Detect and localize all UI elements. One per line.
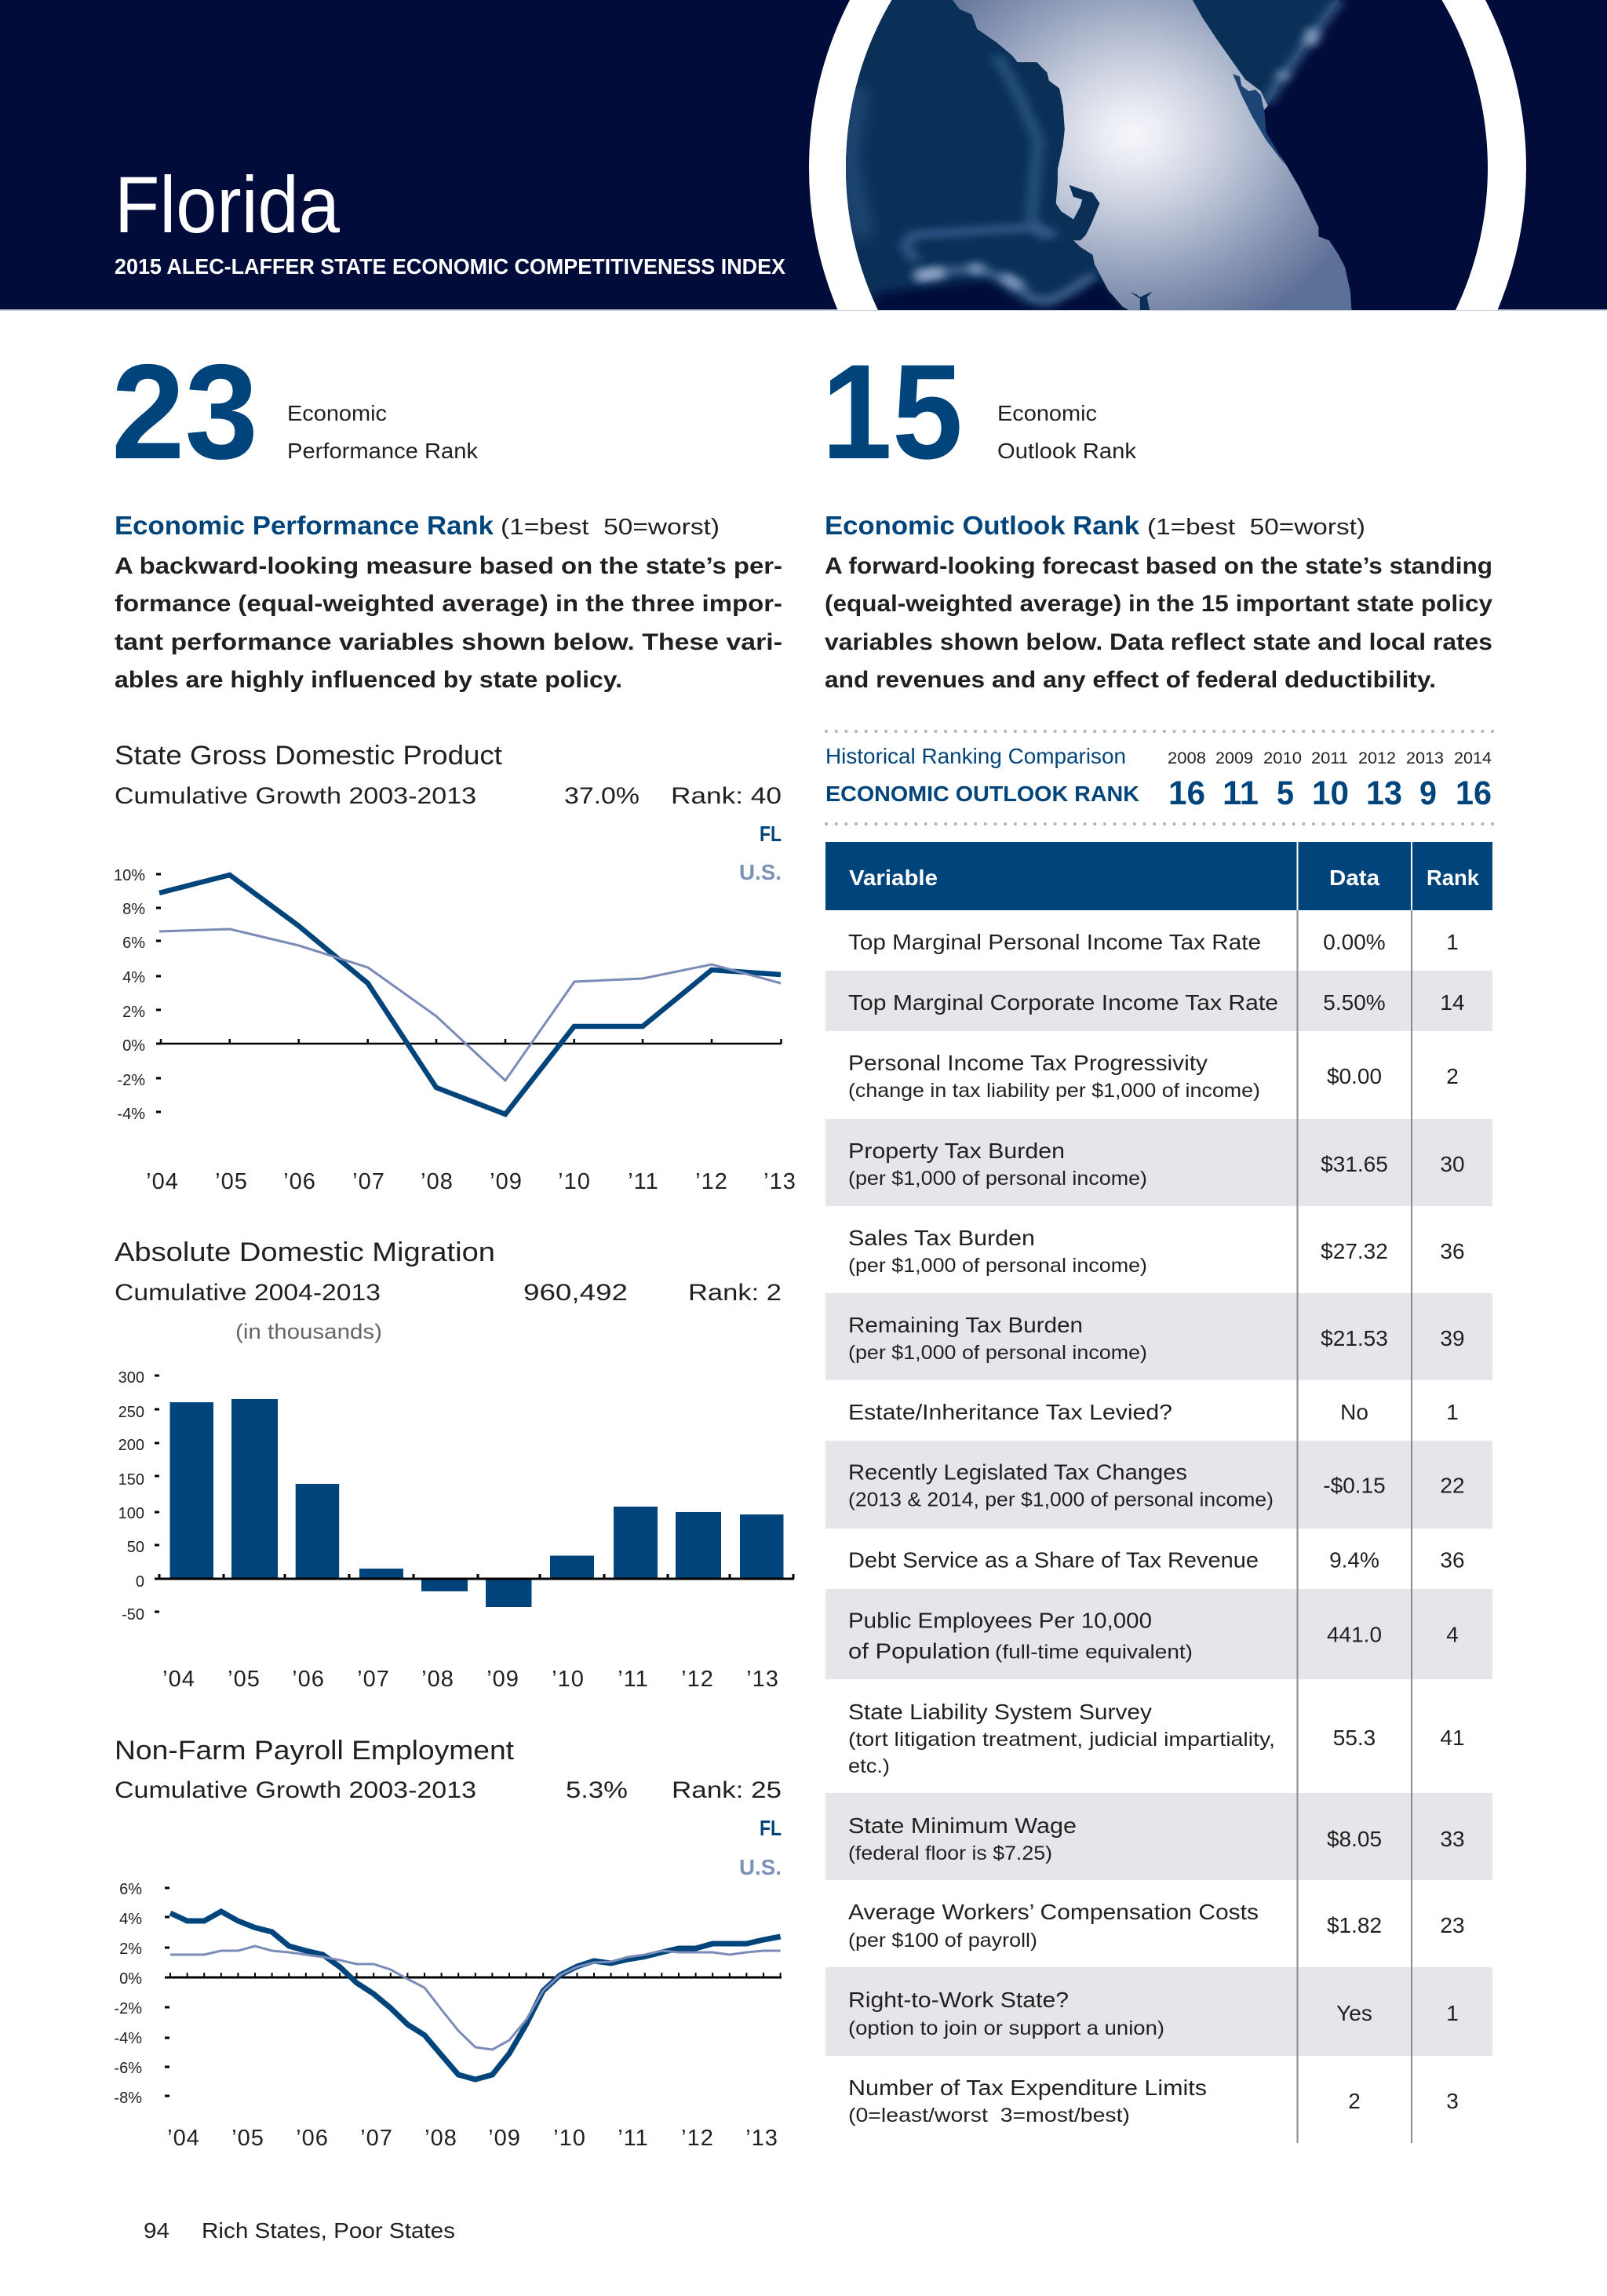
bar chart: migration <box>118 1369 794 1692</box>
row: property tax: Property Tax Burden <box>848 1139 1065 1163</box>
line chart: GDP: -2% <box>117 1072 145 1089</box>
line chart: employment: ’13 <box>745 2126 778 2151</box>
row: property tax: (per $1,000 of personal income) <box>848 1168 1147 1190</box>
panel: historical ranking comparison: 11 <box>1223 774 1259 812</box>
panel: historical ranking comparison: 2013 <box>1406 749 1444 767</box>
row: workers compensation <box>848 1900 1465 1952</box>
bar chart: migration: ’10 <box>552 1667 585 1692</box>
row: liability system: State Liability System Survey <box>848 1700 1152 1724</box>
row: debt service <box>848 1547 1465 1573</box>
row: debt service: Debt Service as a Share of Tax Revenue <box>848 1547 1259 1573</box>
line chart: GDP: ’11 <box>628 1169 659 1194</box>
panel: historical ranking comparison: 2008 <box>1168 749 1206 767</box>
legend <box>739 1816 782 1879</box>
row: progressivity <box>848 1051 1459 1102</box>
panel: absolute domestic migration: Rank: 2 <box>688 1280 782 1306</box>
line chart: employment: -4% <box>114 2030 142 2047</box>
bar chart: migration: ’04 <box>162 1667 195 1692</box>
text block: performance description: formance (equal-weighted average) in the three impor- <box>115 591 782 617</box>
bar chart: migration: ’09 <box>486 1667 519 1692</box>
table header <box>825 842 1492 910</box>
line chart: GDP: ’09 <box>490 1169 523 1194</box>
row: property tax: 30 <box>1440 1152 1465 1176</box>
line chart: GDP: 0% <box>122 1037 145 1055</box>
economic performance rank number: Economic <box>287 401 387 425</box>
panel: historical ranking comparison: 2009 <box>1215 749 1253 767</box>
row: workers compensation: $1.82 <box>1327 1913 1382 1937</box>
bar chart: migration: ’13 <box>746 1667 779 1692</box>
row: liability system: 55.3 <box>1333 1726 1376 1750</box>
bar chart: migration: ’05 <box>228 1667 261 1692</box>
row: personal income tax rate: 1 <box>1446 930 1459 954</box>
panel: historical ranking comparison: 16 <box>1456 774 1492 812</box>
row: debt service: 36 <box>1440 1547 1465 1573</box>
panel: historical ranking comparison <box>825 731 1493 824</box>
row: legislated tax changes: -$0.15 <box>1323 1474 1386 1497</box>
line chart: GDP: 4% <box>122 969 145 986</box>
text block: performance description <box>115 511 782 693</box>
line chart: employment: ’05 <box>231 2126 264 2151</box>
row: sales tax: 36 <box>1440 1239 1465 1263</box>
line chart: employment: ’06 <box>296 2126 329 2151</box>
text block: outlook description: (equal-weighted average) in the 15 important state policy <box>825 591 1492 617</box>
panel: non-farm payroll employment <box>114 1736 782 2151</box>
row: minimum wage: 33 <box>1440 1827 1465 1851</box>
line chart: GDP: ’12 <box>695 1169 728 1194</box>
bar chart: migration: ’08 <box>421 1667 454 1692</box>
bar chart: migration: 300 <box>118 1369 144 1387</box>
row: liability system: etc.) <box>848 1755 890 1777</box>
panel: historical ranking comparison: 2010 <box>1263 749 1302 767</box>
row: personal income tax rate: 0.00% <box>1323 930 1386 954</box>
panel: historical ranking comparison: 10 <box>1312 774 1349 812</box>
line chart: employment: 2% <box>119 1941 142 1958</box>
legend: FL <box>760 1816 782 1840</box>
text block: performance description: Economic Performance Rank <box>115 511 494 540</box>
title: Florida <box>115 160 340 250</box>
line chart: employment: ’10 <box>553 2126 586 2151</box>
legend: U.S. <box>739 1855 782 1879</box>
bar chart: migration: 50 <box>127 1539 144 1556</box>
legend: FL <box>760 822 782 846</box>
line chart: employment: 4% <box>119 1911 142 1928</box>
panel: historical ranking comparison: 16 <box>1168 774 1205 812</box>
row: public employees: Public Employees Per 10,000 <box>848 1609 1152 1632</box>
economic performance rank number: Performance Rank <box>287 439 479 463</box>
row: estate tax: 1 <box>1446 1400 1459 1424</box>
line chart: GDP: 2% <box>122 1004 145 1021</box>
row: tax expenditure limits: Number of Tax Expenditure Limits <box>848 2076 1207 2100</box>
panel: non-farm payroll employment: 5.3% <box>566 1777 628 1803</box>
row: corporate income tax rate <box>848 990 1465 1015</box>
row: progressivity: (change in tax liability per $1,000 of income) <box>848 1080 1260 1102</box>
row: corporate income tax rate: 5.50% <box>1323 990 1386 1015</box>
panel: state gross domestic product <box>114 741 796 1194</box>
line chart: employment: ’07 <box>360 2126 393 2151</box>
line chart: employment: -2% <box>114 2000 142 2017</box>
line chart: GDP <box>114 867 796 1194</box>
row: estate tax: Estate/Inheritance Tax Levied? <box>848 1400 1172 1424</box>
row: workers compensation: 23 <box>1440 1913 1465 1937</box>
economic outlook rank number <box>822 337 1137 487</box>
row: legislated tax changes: Recently Legislated Tax Changes <box>848 1460 1187 1485</box>
row: public employees: (full-time equivalent) <box>995 1642 1193 1664</box>
panel: historical ranking comparison: Historical Ranking Comparison <box>825 744 1126 768</box>
row: legislated tax changes <box>848 1460 1465 1511</box>
panel: historical ranking comparison: 5 <box>1277 774 1294 812</box>
panel: state gross domestic product: Cumulative Growth 2003-2013 <box>115 783 476 809</box>
panel: historical ranking comparison: 2012 <box>1358 749 1396 767</box>
bar chart: migration: 150 <box>118 1471 144 1489</box>
row: right to work: (option to join or support a union) <box>848 2017 1164 2039</box>
row: workers compensation: (per $100 of payroll) <box>848 1930 1037 1952</box>
line chart: employment: ’04 <box>167 2126 200 2151</box>
table header: Data <box>1329 866 1379 890</box>
economic performance rank number: 23 <box>111 337 258 487</box>
row: remaining tax <box>848 1313 1465 1364</box>
row: personal income tax rate: Top Marginal Personal Income Tax Rate <box>848 930 1261 954</box>
row: public employees: 4 <box>1446 1623 1459 1646</box>
panel: historical ranking comparison: 2014 <box>1454 749 1492 767</box>
row: tax expenditure limits: (0=least/worst 3=most/best) <box>848 2105 1130 2127</box>
line chart: GDP: ’08 <box>421 1169 454 1194</box>
row: remaining tax: (per $1,000 of personal income) <box>848 1342 1147 1364</box>
panel: absolute domestic migration <box>115 1237 794 1692</box>
text block: outlook description: Economic Outlook Rank <box>825 511 1140 540</box>
bar chart: migration: 250 <box>118 1404 144 1421</box>
panel: state gross domestic product: State Gross Domestic Product <box>115 741 503 771</box>
footer: 94 <box>144 2218 169 2243</box>
row: corporate income tax rate: 14 <box>1440 990 1465 1015</box>
panel: state gross domestic product: Rank: 40 <box>671 783 782 809</box>
line chart: GDP: ’05 <box>215 1169 248 1194</box>
bar chart: migration: -50 <box>122 1606 144 1624</box>
row: minimum wage: (federal floor is $7.25) <box>848 1842 1052 1864</box>
text block: outlook description: A forward-looking forecast based on the state’s standing <box>825 553 1492 579</box>
panel: historical ranking comparison: 2011 <box>1311 749 1348 767</box>
bar chart: migration: ’12 <box>681 1667 714 1692</box>
row: legislated tax changes: 22 <box>1440 1474 1465 1497</box>
table header: Rank <box>1427 866 1479 890</box>
line chart: GDP: 10% <box>114 867 145 884</box>
line chart: employment: 0% <box>119 1970 142 1988</box>
bar chart: migration: 0 <box>136 1573 144 1591</box>
line chart: employment: ’11 <box>618 2126 649 2151</box>
row: tax expenditure limits: 3 <box>1446 2089 1459 2113</box>
panel: non-farm payroll employment: Non-Farm Payroll Employment <box>115 1736 515 1766</box>
line chart: GDP: ’06 <box>283 1169 316 1194</box>
row: right to work <box>848 1988 1459 2039</box>
line chart: GDP: ’10 <box>558 1169 591 1194</box>
panel: absolute domestic migration: Absolute Domestic Migration <box>115 1237 495 1267</box>
line chart: employment: ’09 <box>488 2126 521 2151</box>
row: minimum wage: State Minimum Wage <box>848 1813 1077 1838</box>
line chart: employment: ’08 <box>425 2126 457 2151</box>
line chart: employment: ’12 <box>681 2126 714 2151</box>
bar chart: migration: ’06 <box>292 1667 325 1692</box>
economic outlook rank number: Outlook Rank <box>997 439 1137 463</box>
row: estate tax <box>848 1400 1459 1424</box>
row: remaining tax: Remaining Tax Burden <box>848 1313 1083 1337</box>
legend <box>739 822 782 884</box>
economic performance rank number <box>111 337 479 487</box>
footer: Rich States, Poor States <box>202 2218 455 2243</box>
table: policy variables <box>825 842 1492 2143</box>
economic outlook rank number: Economic <box>997 401 1097 425</box>
line chart: GDP: 8% <box>122 901 145 918</box>
line chart: GDP: ’04 <box>146 1169 179 1194</box>
map of Florida in ring <box>809 0 1526 310</box>
row: liability system: (tort litigation treatment, judicial impartiality, <box>848 1729 1275 1751</box>
row: public employees: 441.0 <box>1327 1623 1382 1646</box>
text block: outlook description: and revenues and any effect of federal deductibility. <box>825 667 1436 693</box>
row: corporate income tax rate: Top Marginal Corporate Income Tax Rate <box>848 990 1278 1015</box>
text block: outlook description: (1=best 50=worst) <box>1147 515 1365 540</box>
subtitle: 2015 ALEC-LAFFER STATE ECONOMIC COMPETITIVENESS INDEX <box>115 254 785 279</box>
panel: historical ranking comparison: 9 <box>1419 774 1437 812</box>
text block: performance description: tant performance variables shown below. These vari- <box>115 629 782 655</box>
text block: outlook description <box>825 511 1492 693</box>
row: liability system <box>848 1700 1465 1777</box>
row: remaining tax: 39 <box>1440 1326 1465 1350</box>
text block: outlook description: variables shown below. Data reflect state and local rates <box>825 629 1492 655</box>
line chart: employment: 6% <box>119 1881 142 1898</box>
text block: performance description: A backward-looking measure based on the state’s per- <box>115 553 782 579</box>
row: sales tax: $27.32 <box>1321 1239 1388 1263</box>
panel: historical ranking comparison: 13 <box>1366 774 1402 812</box>
row: progressivity: Personal Income Tax Progressivity <box>848 1051 1208 1075</box>
row: property tax: $31.65 <box>1321 1152 1388 1176</box>
panel: absolute domestic migration: Cumulative 2004-2013 <box>115 1280 381 1306</box>
row: legislated tax changes: (2013 & 2014, per $1,000 of personal income) <box>848 1489 1274 1511</box>
legend: U.S. <box>739 860 782 884</box>
line chart: GDP: 6% <box>122 935 145 952</box>
row: property tax <box>848 1139 1465 1190</box>
bar chart: migration: 200 <box>118 1437 144 1454</box>
row: liability system: 41 <box>1440 1726 1465 1750</box>
bar chart: migration: ’07 <box>357 1667 390 1692</box>
row: tax expenditure limits: 2 <box>1348 2089 1361 2113</box>
row: minimum wage: $8.05 <box>1327 1827 1382 1851</box>
panel: absolute domestic migration: (in thousands) <box>235 1320 382 1343</box>
row: sales tax <box>848 1226 1465 1277</box>
row: progressivity: 2 <box>1446 1064 1459 1088</box>
row: workers compensation: Average Workers’ Compensation Costs <box>848 1900 1259 1924</box>
bar chart: migration: ’11 <box>618 1667 649 1692</box>
table header: Variable <box>849 866 938 890</box>
row: sales tax: Sales Tax Burden <box>848 1226 1035 1250</box>
panel: non-farm payroll employment: Cumulative Growth 2003-2013 <box>115 1777 476 1803</box>
row: estate tax: No <box>1340 1400 1368 1424</box>
bar chart: migration: 100 <box>118 1505 144 1522</box>
text block: performance description: ables are highly influenced by state policy. <box>115 667 622 693</box>
row: debt service: 9.4% <box>1329 1547 1379 1573</box>
row: minimum wage <box>848 1813 1465 1864</box>
row: sales tax: (per $1,000 of personal income) <box>848 1255 1147 1277</box>
line chart: employment: -6% <box>114 2060 142 2077</box>
panel: state gross domestic product: 37.0% <box>564 783 640 809</box>
economic outlook rank number: 15 <box>822 337 963 487</box>
line chart: employment <box>114 1881 782 2151</box>
row: right to work: Yes <box>1336 2001 1372 2025</box>
line chart: GDP: -4% <box>117 1106 145 1123</box>
panel: non-farm payroll employment: Rank: 25 <box>672 1777 782 1803</box>
row: right to work: 1 <box>1446 2001 1459 2025</box>
text block: performance description: (1=best 50=worst) <box>501 515 720 540</box>
row: tax expenditure limits <box>848 2076 1459 2127</box>
line chart: GDP: ’13 <box>763 1169 796 1194</box>
row: right to work: Right-to-Work State? <box>848 1988 1069 2012</box>
panel: historical ranking comparison: ECONOMIC OUTLOOK RANK <box>825 782 1139 806</box>
panel: absolute domestic migration: 960,492 <box>523 1280 628 1306</box>
header banner <box>0 0 1607 311</box>
row: remaining tax: $21.53 <box>1321 1326 1388 1350</box>
row: public employees <box>848 1609 1459 1664</box>
row: progressivity: $0.00 <box>1327 1064 1382 1088</box>
line chart: GDP: ’07 <box>352 1169 385 1194</box>
line chart: employment: -8% <box>114 2090 142 2107</box>
row: personal income tax rate <box>848 930 1459 954</box>
row: public employees: of Population <box>848 1638 990 1664</box>
